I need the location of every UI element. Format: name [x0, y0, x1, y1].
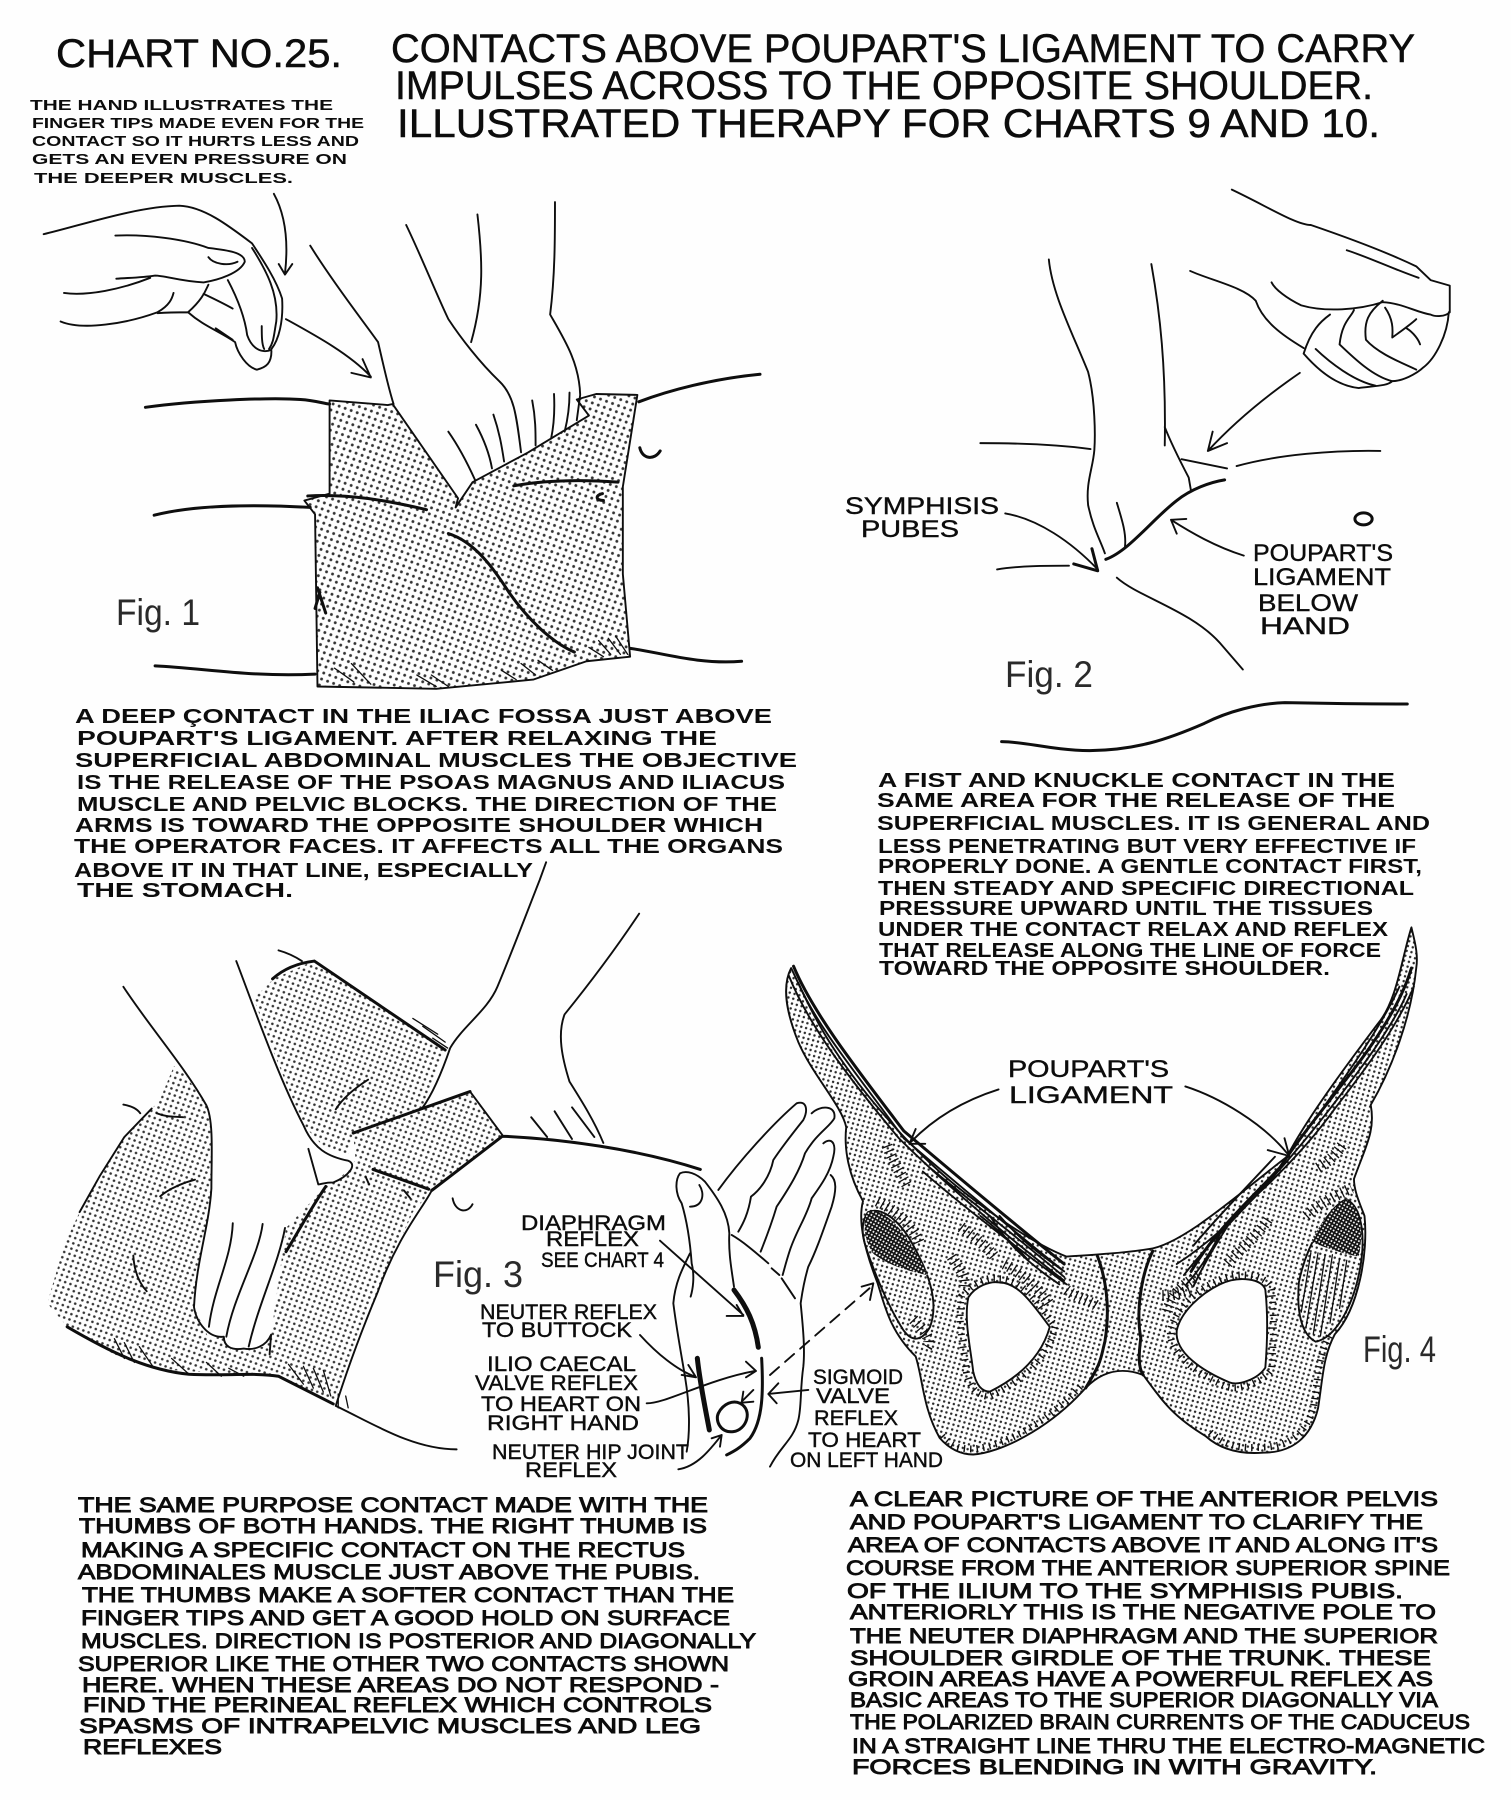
text: fig 3 description: FINGER TIPS AND GET A GOOD HOLD ON SURFACE: [81, 1607, 730, 1630]
text: fig 4 description: THE NEUTER DIAPHRAGM AND THE SUPERIOR: [850, 1625, 1438, 1648]
figure 3 inset: open hand with reflex points: [640, 1103, 873, 1469]
hatching: [114, 1018, 448, 1408]
text: fig 3 description: THUMBS OF BOTH HANDS. THE RIGHT THUMB IS: [79, 1515, 707, 1538]
iliac shading right: [1301, 1253, 1347, 1336]
arrows: [909, 1086, 1289, 1156]
text: fig 1 description: THE STOMACH.: [77, 880, 293, 902]
text: fig 4 description: [846, 1488, 1485, 1779]
figure 1 illustration: [44, 194, 760, 689]
text: fig 3 description: REFLEXES: [83, 1736, 222, 1759]
text: fig 4 description: COURSE FROM THE ANTERIOR SUPERIOR SPINE: [846, 1557, 1450, 1580]
symphysis lines: [1086, 1251, 1153, 1388]
hand thick edge: [286, 1186, 326, 1252]
title: [56, 27, 1415, 146]
text: fig 2 description: THAT RELEASE ALONG THE LINE OF FORCE: [879, 940, 1381, 962]
text: fig 3 description: SPASMS OF INTRAPELVIC MUSCLES AND LEG: [79, 1715, 701, 1738]
labels: fig 4: Fig. 4: [1363, 1329, 1436, 1370]
text: fig 4 description: AND POUPART'S LIGAMENT TO CLARIFY THE: [850, 1511, 1423, 1534]
labels: fig 3: TO BUTTOCK: [482, 1319, 632, 1342]
text: fig 4 description: THE POLARIZED BRAIN CURRENTS OF THE CADUCEUS: [850, 1711, 1470, 1734]
labels: fig 4: [1008, 1056, 1436, 1370]
left ligament band: [794, 966, 1064, 1264]
text: fig 1 description: POUPART'S LIGAMENT. AFTER RELAXING THE: [77, 728, 717, 750]
title: ILLUSTRATED THERAPY FOR CHARTS 9 AND 10.: [397, 102, 1380, 146]
text: fig 1 description: ARMS IS TOWARD THE OPPOSITE SHOULDER WHICH: [75, 815, 763, 837]
labels: fig 3: ILIO CAECAL: [487, 1353, 636, 1376]
text: fig 4 description: OF THE ILIUM TO THE SYMPHISIS PUBIS.: [847, 1580, 1403, 1603]
text: fig 1 description: SUPERFICIAL ABDOMINAL MUSCLES THE OBJECTIVE: [75, 750, 797, 772]
reflex lines: [697, 1290, 758, 1430]
label: fig 1: Fig. 1: [116, 592, 200, 633]
text: fig 4 description: A CLEAR PICTURE OF THE ANTERIOR PELVIS: [850, 1488, 1438, 1511]
inset hand: [44, 206, 282, 370]
text: fig 3 description: HERE. WHEN THESE AREAS DO NOT RESPOND -: [82, 1674, 719, 1697]
abdomen shaded: [304, 394, 637, 689]
ligament line: [1106, 480, 1225, 559]
text: fig 4 description: ANTERIORLY THIS IS THE NEGATIVE POLE TO: [850, 1601, 1436, 1624]
text: fig 4 description: AREA OF CONTACTS ABOVE IT AND ALONG IT'S: [848, 1534, 1438, 1557]
labels: fig 3: REFLEX: [814, 1407, 898, 1430]
hand note: [30, 97, 364, 187]
arms and fingers: [310, 202, 580, 480]
iliac hatch left: [865, 1211, 928, 1275]
figure 4 illustration: pelvis: [786, 927, 1417, 1455]
text: fig 4 description: BASIC AREAS TO THE SUPERIOR DIAGONALLY VIA: [850, 1689, 1438, 1712]
outer edge and fossa hatching: [942, 1334, 1330, 1449]
labels: fig 3: [433, 1212, 943, 1482]
hand note: THE HAND ILLUSTRATES THE: [30, 97, 333, 114]
left obturator hole: [967, 1282, 1050, 1392]
shaded body areas: [47, 961, 502, 1404]
far arm: [423, 862, 639, 1143]
text: fig 4 description: GROIN AREAS HAVE A POWERFUL REFLEX AS: [848, 1668, 1433, 1691]
symphisis arrowhead: [1074, 549, 1098, 571]
text: fig 3 description: THE SAME PURPOSE CONTACT MADE WITH THE: [78, 1494, 708, 1517]
text: fig 2 description: LESS PENETRATING BUT VERY EFFECTIVE IF: [878, 836, 1416, 858]
labels: fig 2: PUBES: [861, 516, 959, 543]
labels: fig 3: REFLEX: [546, 1228, 639, 1251]
text: fig 2 description: THEN STEADY AND SPECIFIC DIRECTIONAL: [878, 878, 1414, 900]
hatching: [334, 636, 628, 687]
labels: fig 3: TO HEART ON: [481, 1393, 641, 1416]
labels: fig 2: SYMPHISIS: [845, 493, 999, 520]
text: fig 2 description: SUPERFICIAL MUSCLES. IT IS GENERAL AND: [877, 813, 1430, 835]
figure 2 illustration: [980, 190, 1450, 670]
hand note: GETS AN EVEN PRESSURE ON: [32, 151, 347, 168]
labels: fig 3: DIAPHRAGM: [521, 1212, 666, 1235]
text: fig 4 description: FORCES BLENDING IN WITH GRAVITY.: [852, 1756, 1377, 1779]
text: fig 2 description: TOWARD THE OPPOSITE SHOULDER.: [879, 958, 1330, 980]
labels: fig 2: Fig. 2: [1005, 654, 1093, 695]
text: fig 3 description: SUPERIOR LIKE THE OTHER TWO CONTACTS SHOWN: [78, 1653, 729, 1676]
arrows: [640, 1241, 873, 1469]
text: fig 1 description: IS THE RELEASE OF THE PSOAS MAGNUS AND ILIACUS: [77, 772, 785, 794]
text: fig 3 description: MAKING A SPECIFIC CONTACT ON THE RECTUS: [81, 1539, 685, 1562]
text: fig 3 description: FIND THE PERINEAL REFLEX WHICH CONTROLS: [83, 1694, 712, 1717]
labels: fig 3: SIGMOID: [813, 1366, 903, 1389]
title: IMPULSES ACROSS TO THE OPPOSITE SHOULDER.: [395, 64, 1373, 108]
labels: fig 3: TO HEART: [808, 1429, 921, 1452]
hand note: THE DEEPER MUSCLES.: [34, 170, 293, 187]
dashed arrow: [770, 1285, 873, 1375]
iliac fossa left: [863, 1211, 933, 1339]
figure 3 illustration: [47, 862, 700, 1449]
title: CHART NO.25.: [56, 32, 342, 76]
text: fig 4 description: IN A STRAIGHT LINE THRU THE ELECTRO-MAGNETIC: [852, 1735, 1485, 1758]
text: fig 3 description: THE THUMBS MAKE A SOFTER CONTACT THAN THE: [82, 1584, 734, 1607]
labels: fig 2: BELOW: [1258, 590, 1358, 617]
text: fig 1 description: MUSCLE AND PELVIC BLOCKS. THE DIRECTION OF THE: [77, 794, 777, 816]
text: fig 2 description: A FIST AND KNUCKLE CONTACT IN THE: [878, 770, 1395, 792]
near hand: [123, 961, 356, 1351]
labels: fig 3: REFLEX: [525, 1459, 617, 1482]
labels: fig 4: LIGAMENT: [1009, 1082, 1173, 1109]
text: fig 3 description: MUSCLES. DIRECTION IS POSTERIOR AND DIAGONALLY: [81, 1630, 756, 1653]
arm and body contours: [980, 259, 1380, 670]
labels: fig 3: RIGHT HAND: [487, 1412, 639, 1435]
iliac hatch right: [1311, 1199, 1361, 1257]
text: fig 2 description: PRESSURE UPWARD UNTIL THE TISSUES: [879, 898, 1373, 920]
right ligament band: [1191, 968, 1411, 1271]
labels: fig 2: LIGAMENT: [1253, 564, 1391, 591]
labels: fig 3: SEE CHART 4: [541, 1249, 664, 1272]
iliac fossa right: [1298, 1199, 1363, 1342]
right obturator hole: [1177, 1279, 1267, 1383]
labels: fig 2: [845, 493, 1393, 695]
text: fig 2 description: [877, 770, 1430, 980]
hip joint circle: [717, 1402, 747, 1432]
hand outline and fingers: [123, 961, 352, 1354]
pelvis outline: [786, 927, 1417, 1455]
thigh and torso contours: [67, 961, 700, 1404]
text: fig 2 description: PROPERLY DONE. A GENTLE CONTACT FIRST,: [878, 856, 1422, 878]
arrows to hand and contact: [274, 194, 371, 377]
labels: fig 3: VALVE REFLEX: [475, 1372, 638, 1395]
text: fig 3 description: ABDOMINALES MUSCLE JUST ABOVE THE PUBIS.: [78, 1561, 700, 1584]
labels: fig 3: NEUTER HIP JOINT: [492, 1441, 689, 1464]
title: CONTACTS ABOVE POUPART'S LIGAMENT TO CARRY: [391, 27, 1415, 71]
hand note: FINGER TIPS MADE EVEN FOR THE: [32, 115, 364, 132]
labels: fig 4: POUPART'S: [1008, 1056, 1169, 1083]
labels: fig 3: NEUTER REFLEX: [480, 1301, 657, 1324]
text: fig 1 description: A DEEP ÇONTACT IN THE ILIAC FOSSA JUST ABOVE: [75, 706, 772, 728]
text: fig 2 description: SAME AREA FOR THE RELEASE OF THE: [877, 790, 1395, 812]
navel: [1355, 513, 1372, 525]
labels: fig 2: HAND: [1260, 613, 1350, 640]
text: fig 2 description: UNDER THE CONTACT RELAX AND REFLEX: [878, 919, 1389, 941]
hand note: CONTACT SO IT HURTS LESS AND: [32, 133, 359, 150]
thumb and palm: [673, 1172, 795, 1452]
labels: fig 2: POUPART'S: [1253, 540, 1393, 567]
lower body contour, fig 2: [1002, 703, 1407, 751]
text: fig 3 description: [78, 1494, 756, 1759]
text: fig 4 description: SHOULDER GIRDLE OF THE TRUNK. THESE: [850, 1647, 1431, 1670]
body contours: [145, 374, 760, 675]
arrows: [1005, 373, 1300, 569]
text: fig 1 description: [74, 706, 797, 902]
labels: fig 3: VALVE: [816, 1385, 890, 1408]
labels: fig 3: ON LEFT HAND: [790, 1449, 943, 1472]
fingers: [718, 1103, 835, 1467]
text: fig 1 description: ABOVE IT IN THAT LINE, ESPECIALLY: [74, 860, 534, 882]
fist: [1190, 190, 1450, 388]
labels: fig 3: Fig. 3: [433, 1254, 523, 1295]
text: fig 1 description: THE OPERATOR FACES. IT AFFECTS ALL THE ORGANS: [74, 836, 783, 858]
